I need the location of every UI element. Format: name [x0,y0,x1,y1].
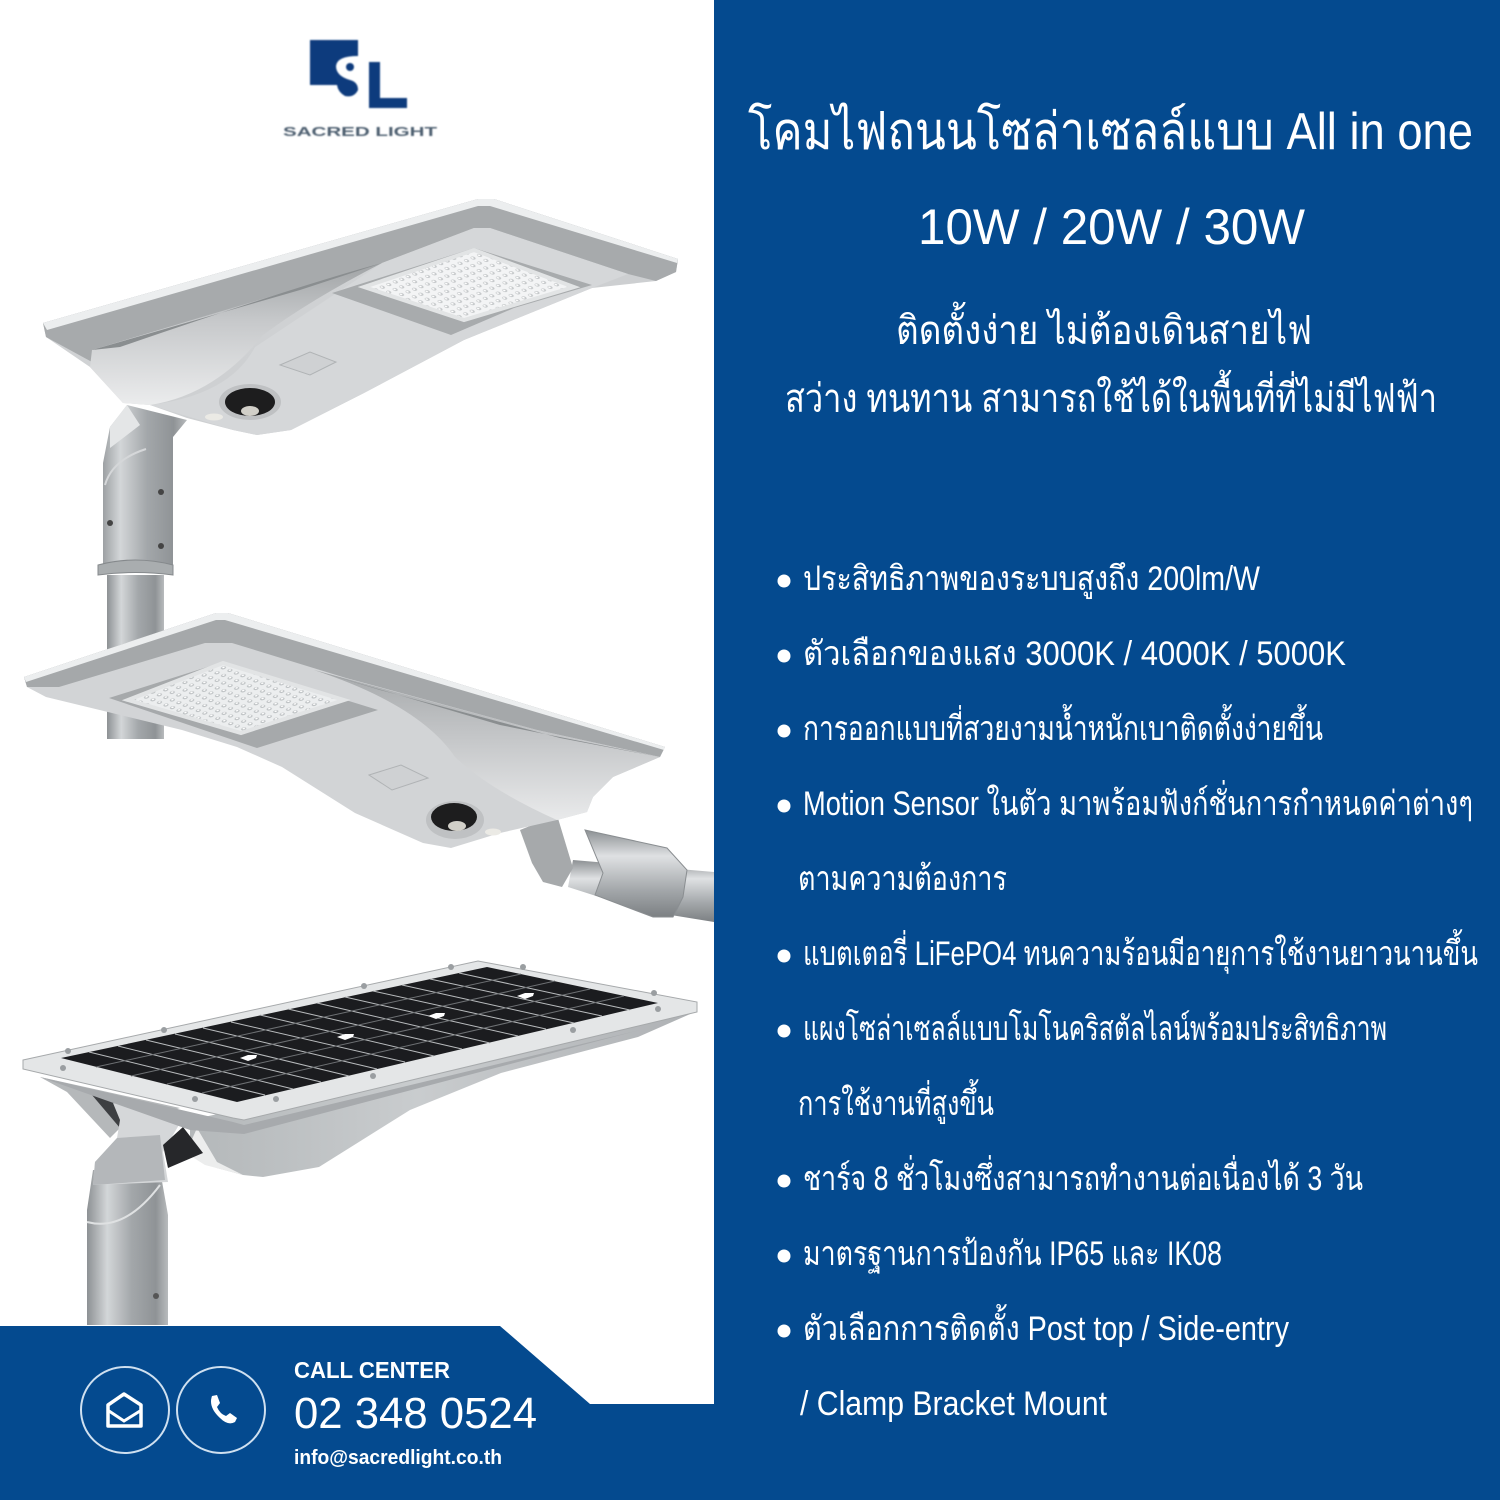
solar panel [61,967,658,1102]
pole: upper lamp post [98,405,187,739]
call center label: CALL CENTER [294,1357,450,1383]
frame [23,961,697,1120]
cover plate [369,765,428,790]
rim band [24,613,665,757]
lamp 1: underside with LED module [43,199,678,435]
bracket [93,1103,183,1185]
feature: mounting continued: / Clamp Bracket Mount [800,1385,1107,1423]
feature list [778,560,1478,1423]
icon: home mail [81,1367,169,1453]
feature: colour temperature: ตัวเลือกของแสง 3000K / 4000K / 5000K [803,635,1346,673]
LED recess [332,248,592,335]
lamp 2: side-entry underside view [24,613,714,922]
wattage heading: 10W / 20W / 30W [918,199,1306,255]
feature: design: การออกแบบที่สวยงามน้ำหนักเบาติดตั้งง่ายขึ้น [803,704,1323,748]
sensor [219,384,281,420]
sensor [426,801,484,839]
feature: mounting: ตัวเลือกการติดตั้ง Post top / Side-entry [803,1304,1289,1348]
feature: efficiency: ประสิทธิภาพของระบบสูงถึง 200lm/W [803,560,1260,599]
arm [520,815,573,887]
pole: lower lamp post [87,1170,168,1325]
dome [190,1011,697,1177]
dome [314,670,660,820]
inner plate [150,228,628,435]
subtitle line 1: ติดตั้งง่าย ไม่ต้องเดินสายไฟ [896,301,1312,353]
email: info@sacredlight.co.th [294,1447,502,1469]
LED recess [109,662,378,748]
feature: protection standard: มาตรฐานการป้องกัน IP65 และ IK08 [803,1235,1222,1274]
tube [568,860,714,922]
sleeve [585,830,687,917]
feature: solar panel continued: การใช้งานที่สูงขึ้น [798,1079,994,1124]
feature: motion sensor continued: ตามความต้องการ [798,860,1007,898]
lamp 3: solar panel top view [23,961,697,1185]
feature: charging: ชาร์จ 8 ชั่วโมงซึ่งสามารถทำงานต่อเนื่องได้ 3 วัน [803,1155,1363,1198]
icon: phone [177,1367,265,1453]
left wing [40,1077,180,1138]
cell grid [89,973,630,1095]
cover plate [280,352,336,375]
logo: Sacred Light [283,40,437,139]
footer contact banner [0,1326,714,1500]
rim band [43,199,678,362]
curved dome [90,263,382,405]
phone number: 02 348 0524 [294,1389,537,1438]
panel: blue specification background [714,0,1500,1500]
connector [163,1127,203,1168]
logo: Sacred Light: SACRED LIGHT [283,124,437,139]
